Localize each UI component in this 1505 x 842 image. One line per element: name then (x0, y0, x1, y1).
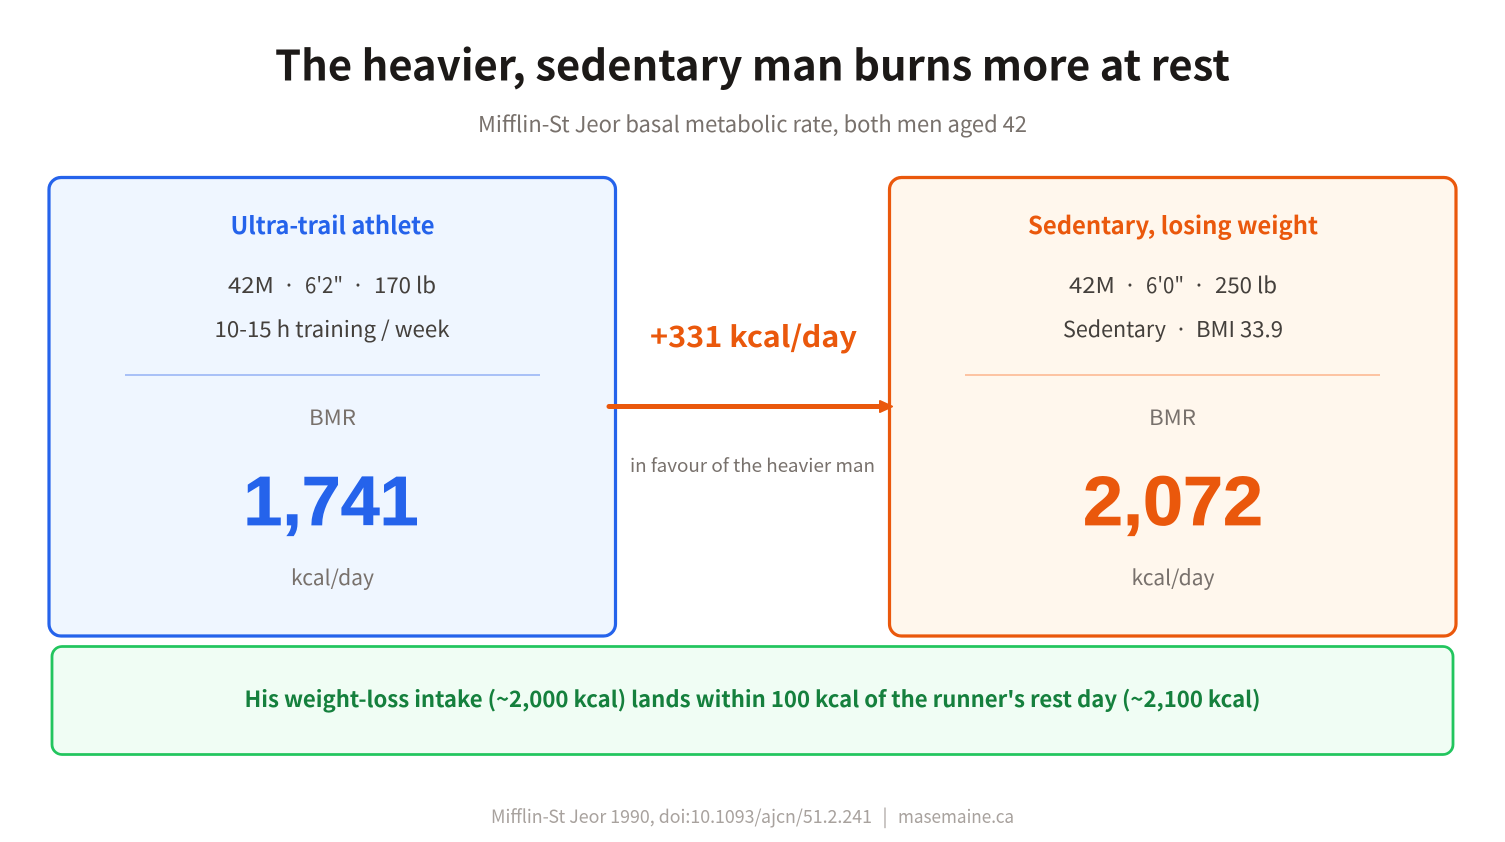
sedentary stats: · (1124, 268, 1136, 300)
sedentary BMI: Sedentary (1063, 312, 1167, 344)
panel heading: sedentary: Sedentary, losing weight (1028, 206, 1318, 241)
athlete BMR label: BMR (309, 402, 356, 432)
sedentary stats: · (1193, 268, 1205, 300)
footer source: | (882, 803, 888, 829)
panel heading: athlete: Ultra-trail athlete (230, 206, 434, 241)
sedentary BMI: BMI 33.9 (1196, 312, 1283, 344)
sedentary BMR label: BMR (1149, 402, 1196, 432)
title: The heavier, sedentary man burns more at rest (275, 32, 1230, 94)
subtitle: Mifflin-St Jeor basal metabolic rate, both men aged 42 (478, 107, 1027, 139)
sedentary stats: 6'0" (1146, 268, 1184, 300)
sedentary unit: kcal/day (1132, 562, 1215, 592)
callout (52, 646, 1453, 754)
athlete stats: 170 lb (374, 268, 436, 300)
footer source: masemaine.ca (898, 803, 1014, 829)
callout: His weight-loss intake (~2,000 kcal) lands within 100 kcal of the runner's rest day (~2,100 kcal) (244, 682, 1260, 714)
athlete unit: kcal/day (291, 562, 374, 592)
athlete BMR value: 1,741 (243, 462, 419, 540)
sedentary stats: 250 lb (1215, 268, 1277, 300)
sedentary BMI (1063, 312, 1283, 344)
difference label: +331 kcal/day (650, 314, 857, 356)
athlete stats (228, 268, 436, 300)
sedentary stats (1069, 268, 1277, 300)
sedentary BMR value: 2,072 (1083, 462, 1263, 540)
arrow (609, 401, 892, 412)
athlete stats: 42M (228, 268, 274, 300)
footer source: Mifflin-St Jeor 1990, doi:10.1093/ajcn/51.2.241 (491, 803, 872, 829)
athlete stats: · (352, 268, 364, 300)
panel: ultra-trail athlete (49, 178, 616, 636)
arrow caption: in favour of the heavier man (630, 452, 875, 478)
athlete stats: · (283, 268, 295, 300)
panel: sedentary man (890, 178, 1456, 636)
sedentary stats: 42M (1069, 268, 1115, 300)
sedentary BMI: · (1175, 312, 1187, 344)
athlete stats: 6'2" (305, 268, 343, 300)
athlete training: 10-15 h training / week (214, 312, 450, 344)
